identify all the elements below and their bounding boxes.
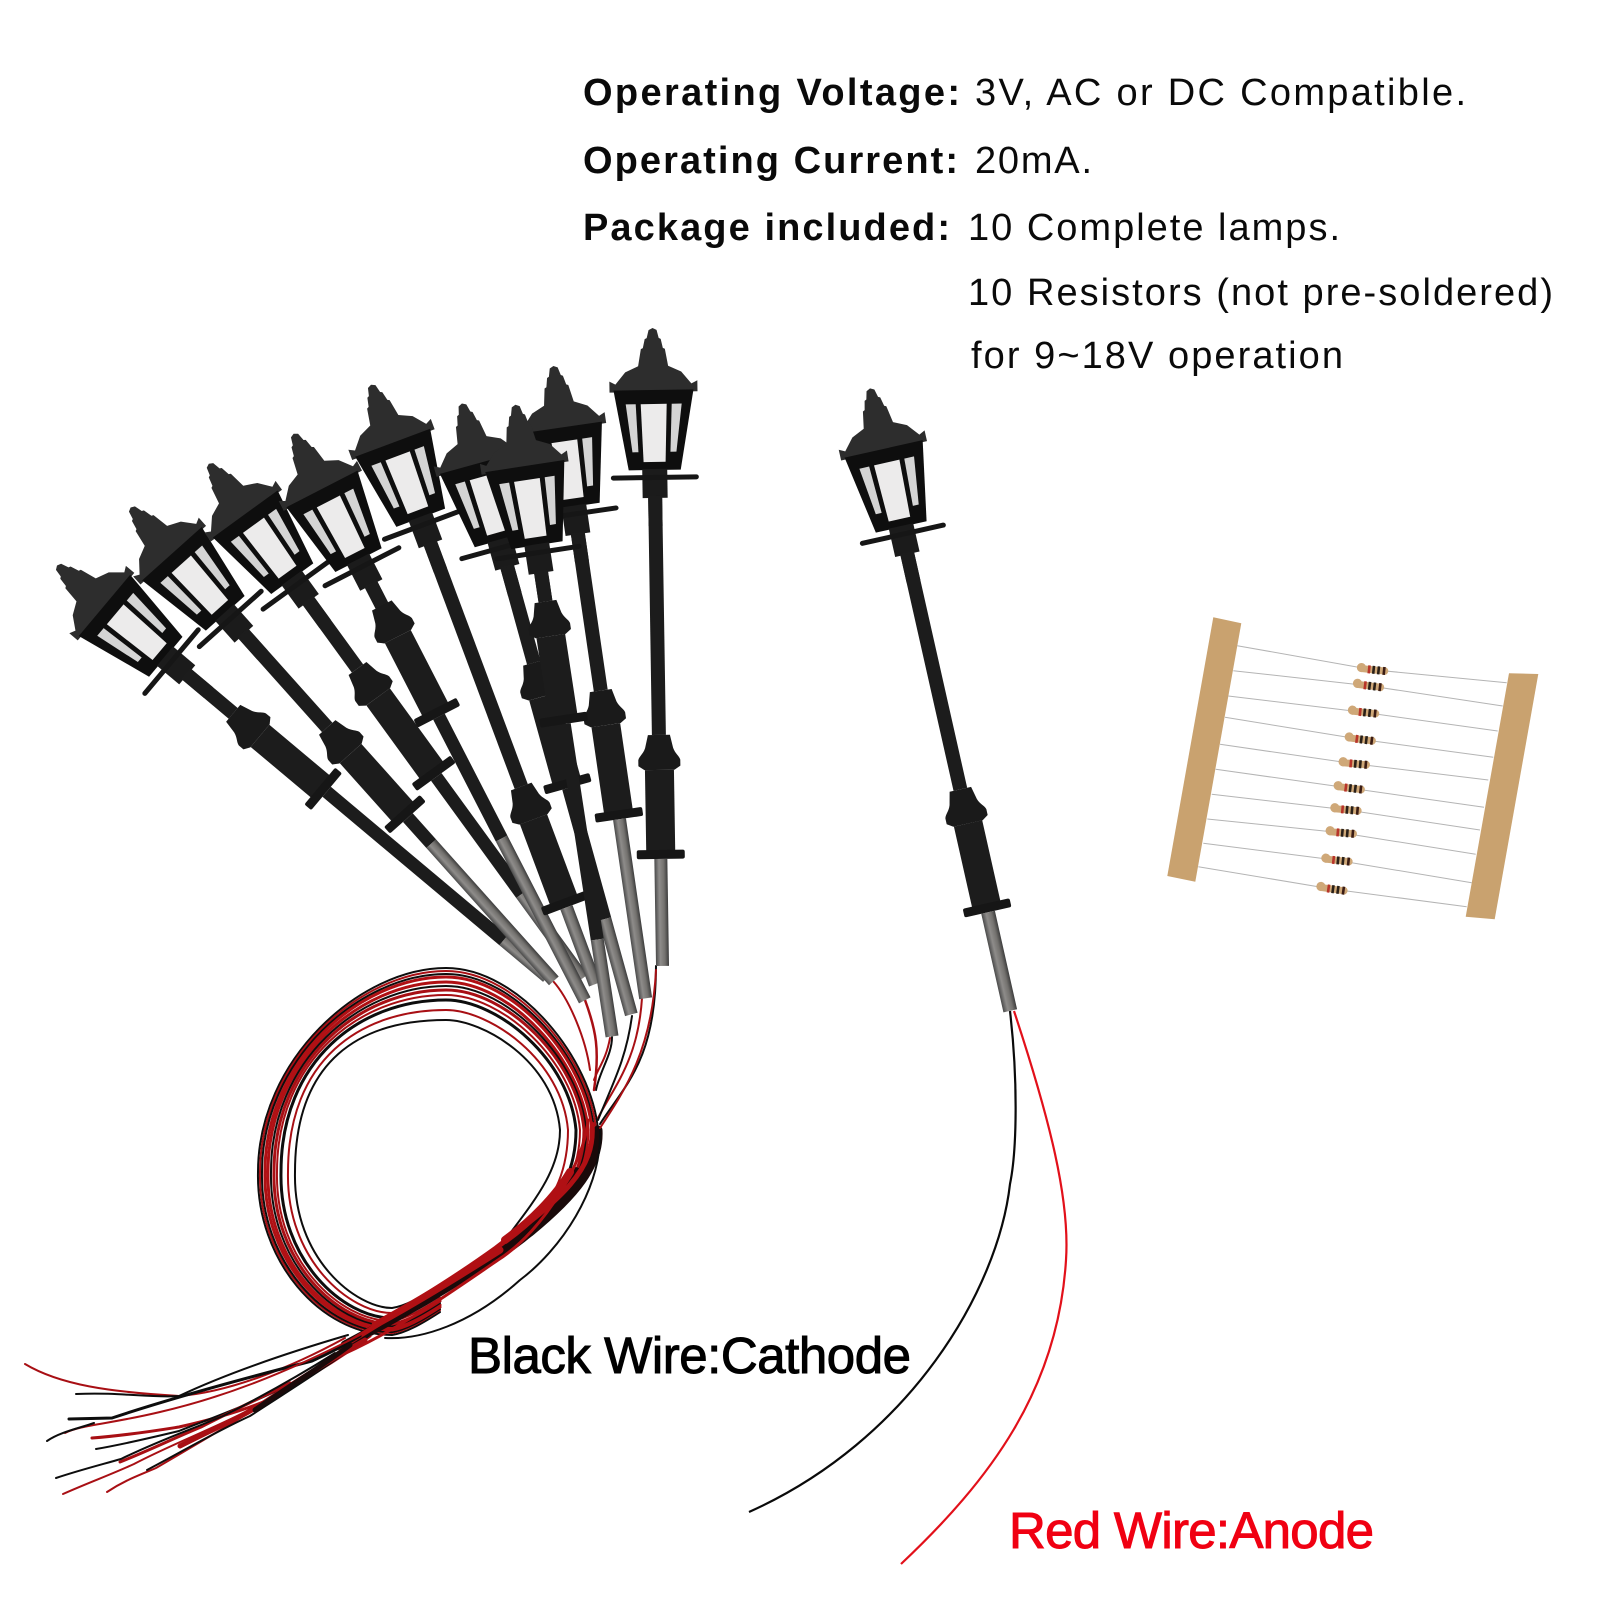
lamp 4 xyxy=(254,414,624,1020)
lamp 7 xyxy=(472,398,656,1043)
lamp fan xyxy=(29,327,707,1043)
label: black wire cathode: Black Wire:Cathode xyxy=(468,1327,911,1384)
lamp 6 xyxy=(420,392,674,1026)
operating current line: 20mA. xyxy=(975,140,1092,182)
single lamp xyxy=(827,379,1053,1020)
fanned wire tails xyxy=(25,1335,370,1494)
resistors xyxy=(1316,663,1389,895)
package included line: 10 Complete lamps. xyxy=(968,207,1340,249)
resistors line: 10 Resistors (not pre-soldered) xyxy=(968,272,1553,314)
label: red wire anode: Red Wire:Anode xyxy=(1009,1502,1374,1559)
wires up to lamp tubes xyxy=(553,966,656,1128)
wire bundle xyxy=(25,966,656,1494)
operating voltage line: Operating Voltage: xyxy=(583,72,960,114)
left paper tape xyxy=(1167,617,1241,882)
package included line xyxy=(583,207,1340,249)
thick bundled section xyxy=(330,1120,600,1360)
lamp 9 xyxy=(609,327,707,967)
operating voltage line xyxy=(583,72,1466,114)
operating current line: Operating Current: xyxy=(583,140,958,182)
black cathode wire xyxy=(749,1011,1016,1512)
operation voltage line: for 9~18V operation xyxy=(971,335,1343,377)
lamp 5 xyxy=(330,369,636,1000)
package included line: Package included: xyxy=(583,207,950,249)
lamp 2 xyxy=(98,478,587,1010)
resistor leads xyxy=(1198,646,1507,907)
lamp 1 xyxy=(29,532,576,1011)
operating voltage line: 3V, AC or DC Compatible. xyxy=(975,72,1466,114)
lamp 3 xyxy=(173,438,618,1004)
red anode wire xyxy=(901,1011,1067,1564)
lamp 8 xyxy=(510,360,689,1005)
specification text block xyxy=(583,72,1553,377)
right paper tape xyxy=(1466,673,1538,919)
wire loop xyxy=(258,968,598,1335)
resistor strip xyxy=(1167,617,1538,919)
